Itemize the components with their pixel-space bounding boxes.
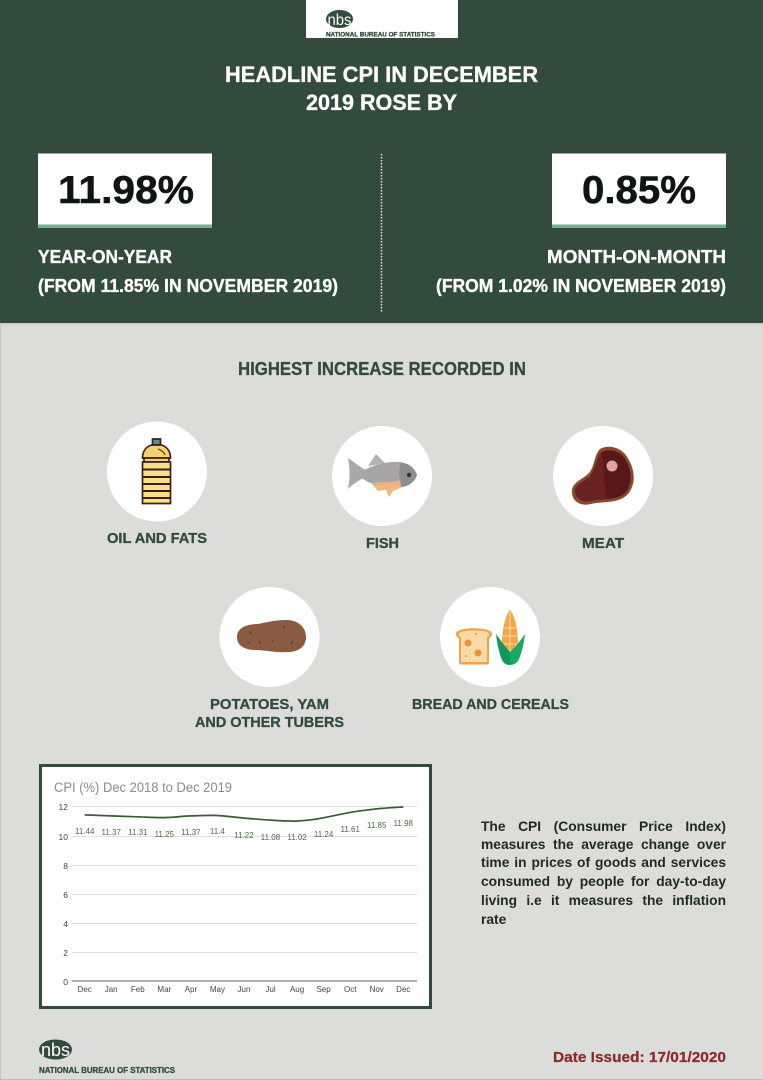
data labels: 11.61 [340, 825, 360, 834]
data labels: 11.08 [261, 833, 281, 842]
item: oil and fats [107, 422, 207, 547]
x-axis labels: Apr [185, 985, 197, 994]
x-axis labels: Sep [316, 985, 331, 994]
stat card: year-on-year [38, 154, 212, 228]
month-on-month text [436, 246, 726, 296]
x-axis labels: Jun [238, 985, 250, 994]
label: FISH [366, 535, 399, 552]
logo: bottom NBS: NATIONAL BUREAU OF STATISTICS [39, 1066, 176, 1075]
x-axis labels: May [210, 985, 225, 994]
title [225, 62, 538, 115]
stat card: month-on-month [552, 154, 726, 228]
header panel [0, 0, 763, 323]
data labels: 11.22 [234, 831, 254, 840]
title: HEADLINE CPI IN DECEMBER [225, 62, 538, 87]
x-axis labels: Nov [370, 985, 384, 994]
y-axis labels: 6 [63, 890, 68, 900]
chart panel [40, 766, 430, 1008]
item: meat [553, 426, 653, 552]
title: 2019 ROSE BY [306, 90, 457, 115]
data labels [75, 819, 414, 842]
CPI explanation text: time in prices of goods and services [481, 855, 726, 870]
CPI explanation text: rate [481, 912, 506, 927]
label [195, 696, 344, 731]
item: bread and cereals [412, 587, 569, 713]
CPI explanation text: The CPI (Consumer Price Index) [481, 819, 726, 834]
chart title: CPI (%) Dec 2018 to Dec 2019 [54, 780, 232, 795]
y-axis labels: 0 [63, 977, 68, 987]
stat card: year-on-year: 11.98% [58, 169, 194, 212]
date issued: Date Issued: 17/01/2020 [553, 1049, 726, 1066]
logo: bottom NBS: nbs [41, 1040, 70, 1060]
y-axis labels: 8 [63, 861, 68, 871]
y-axis labels: 4 [63, 919, 68, 929]
data labels: 11.4 [210, 827, 225, 836]
section heading: HIGHEST INCREASE RECORDED IN [238, 359, 526, 379]
x-axis labels: Aug [290, 985, 304, 994]
month-on-month text: (FROM 1.02% IN NOVEMBER 2019) [436, 275, 726, 296]
data labels: 11.31 [128, 828, 148, 837]
CPI explanation text: consumed by people for day-to-day [481, 874, 726, 889]
data labels: 11.44 [75, 827, 95, 836]
year-on-year text: YEAR-ON-YEAR [38, 246, 172, 267]
data labels: 11.37 [181, 828, 201, 837]
data labels: 11.37 [101, 828, 121, 837]
label: OIL AND FATS [107, 530, 207, 547]
x-axis labels: Jan [105, 985, 118, 994]
y-axis labels: 10 [59, 832, 68, 842]
logo: top NBS [306, 0, 458, 38]
logo: top NBS: NATIONAL BUREAU OF STATISTICS [326, 32, 436, 38]
item: potatoes, yam and other tubers [195, 587, 344, 731]
icon: oil bottle [142, 439, 170, 504]
x-axis labels: Oct [344, 985, 357, 994]
logo: top NBS: nbs [328, 12, 352, 29]
label: POTATOES, YAM [210, 696, 329, 713]
stat card: month-on-month: 0.85% [582, 169, 696, 212]
y-axis labels [59, 802, 68, 987]
data labels: 11.02 [287, 833, 307, 842]
logo: bottom NBS [39, 1040, 176, 1075]
icon: potato [237, 620, 306, 652]
CPI explanation text [481, 819, 726, 927]
label: AND OTHER TUBERS [195, 714, 344, 731]
icon: fish [348, 454, 417, 497]
x-axis labels: Feb [131, 985, 145, 994]
CPI line [85, 807, 403, 821]
icon: meat steak [572, 447, 634, 505]
year-on-year text: (FROM 11.85% IN NOVEMBER 2019) [38, 275, 338, 296]
CPI explanation text: measures the average change over [481, 837, 726, 852]
year-on-year text [38, 246, 338, 296]
month-on-month text: MONTH-ON-MONTH [547, 246, 726, 267]
icon: corn [496, 610, 525, 665]
data labels: 11.25 [155, 830, 175, 839]
label: MEAT [582, 535, 624, 552]
x-axis labels: Dec [396, 985, 410, 994]
data labels: 11.85 [367, 821, 387, 830]
CPI explanation text: living i.e it measures the inflation [481, 893, 726, 908]
x-axis labels: Jul [265, 985, 276, 994]
y-axis labels: 2 [63, 948, 68, 958]
item: fish [332, 426, 432, 552]
label: BREAD AND CEREALS [412, 696, 569, 713]
x-axis labels [78, 985, 410, 994]
data labels: 11.24 [314, 830, 334, 839]
x-axis labels: Mar [157, 985, 172, 994]
x-axis labels: Dec [78, 985, 92, 994]
y-axis labels: 12 [59, 802, 68, 812]
icon: bread [456, 628, 492, 664]
data labels: 11.98 [394, 819, 414, 828]
